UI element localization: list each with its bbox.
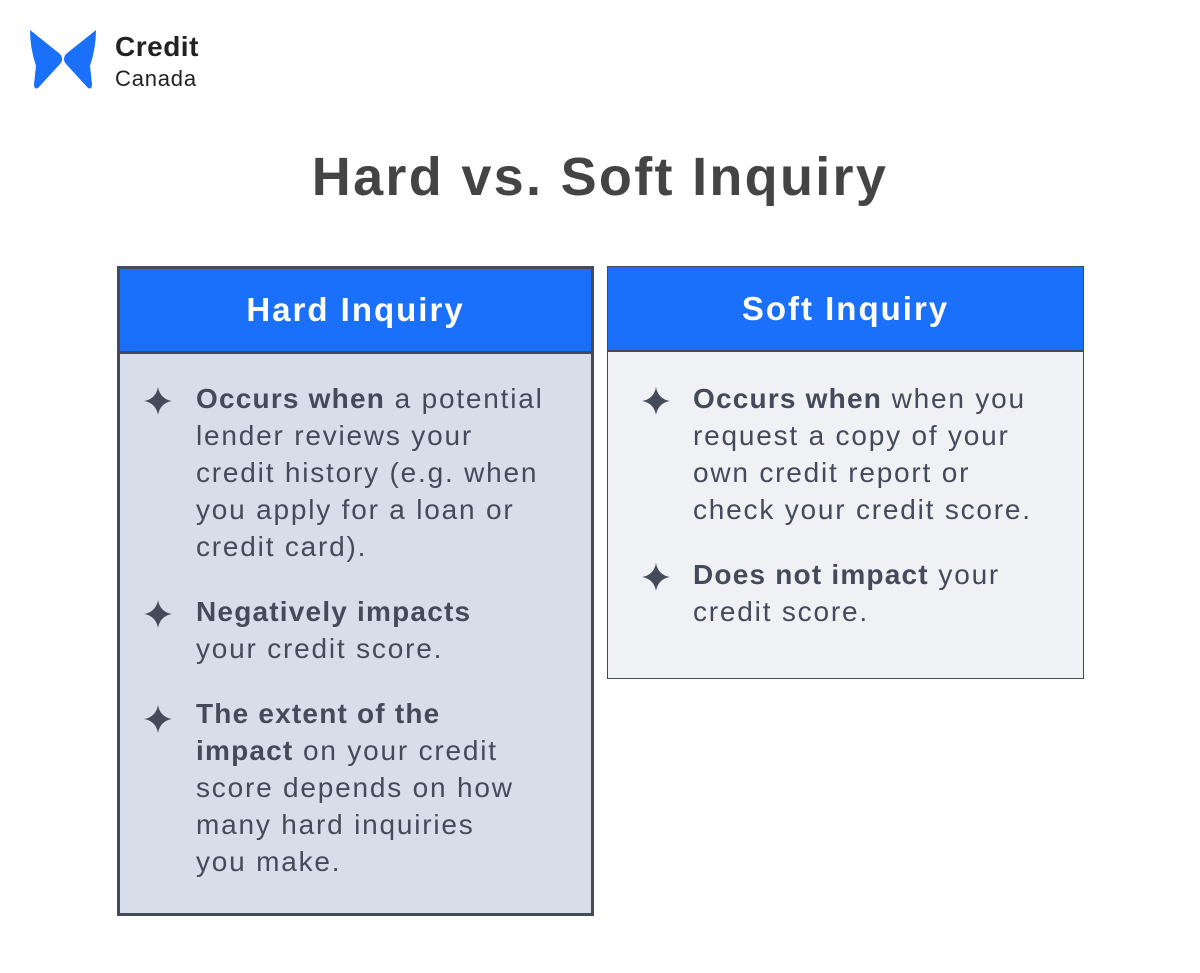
- text: your credit score.: [196, 633, 443, 664]
- text: Occurs when a potential: [196, 383, 544, 414]
- icon: star: [144, 387, 172, 415]
- text: credit card).: [196, 531, 367, 562]
- text: credit score.: [693, 596, 869, 627]
- text: lender reviews your: [196, 420, 473, 451]
- logo text: Canada: [115, 66, 197, 91]
- logo text: [115, 31, 199, 91]
- icon: star: [144, 600, 172, 628]
- text: many hard inquiries: [196, 809, 475, 840]
- icon: star: [642, 563, 670, 591]
- logo text: Credit: [115, 31, 199, 62]
- text: credit history (e.g. when: [196, 457, 538, 488]
- icon: butterfly: [30, 30, 96, 88]
- heading: hard inquiry: Hard Inquiry: [246, 291, 465, 328]
- heading: soft inquiry: [608, 267, 1083, 352]
- title: Hard vs. Soft Inquiry: [312, 147, 888, 207]
- icon: star: [144, 705, 172, 733]
- text: score depends on how: [196, 772, 514, 803]
- text: Does not impact your: [693, 559, 1000, 590]
- soft bullet 2: [642, 563, 670, 591]
- text: The extent of the: [196, 698, 440, 729]
- text: Occurs when when you: [693, 383, 1026, 414]
- hard bullet 1: [144, 387, 172, 415]
- text: you make.: [196, 846, 341, 877]
- text: own credit report or: [693, 457, 970, 488]
- panel: hard inquiry: [117, 266, 594, 916]
- text: you apply for a loan or: [196, 494, 514, 525]
- hard bullet 2: [144, 600, 172, 628]
- text: request a copy of your: [693, 420, 1010, 451]
- icon: star: [642, 387, 670, 415]
- soft bullet 1: [642, 387, 670, 415]
- panel: soft inquiry: [607, 266, 1084, 679]
- hard bullet 3: [144, 705, 172, 733]
- text: Negatively impacts: [196, 596, 471, 627]
- text: impact on your credit: [196, 735, 498, 766]
- heading: hard inquiry: [120, 269, 591, 354]
- logo: [30, 30, 199, 91]
- heading: soft inquiry: Soft Inquiry: [742, 290, 949, 327]
- text: check your credit score.: [693, 494, 1032, 525]
